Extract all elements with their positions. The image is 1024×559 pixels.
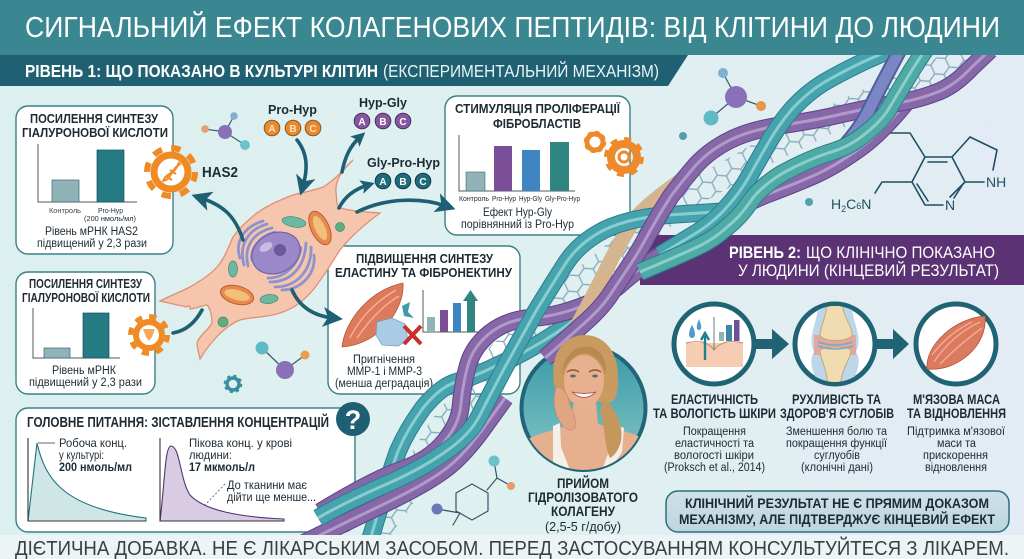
label: HAS2: HAS2	[202, 164, 238, 181]
peptide: Hyp-Gly: Hyp-Gly	[359, 95, 408, 110]
card: fibroblast proliferation: СТИМУЛЯЦІЯ ПРОЛІФЕРАЦІЇ	[455, 101, 620, 116]
chart: culture concentration: Робоча конц.	[59, 436, 127, 450]
icon: molecule upper left	[201, 112, 250, 150]
outcome: muscle: маси та	[937, 438, 977, 450]
label: collagen intake: ГІДРОЛІЗОВАТОГО	[528, 489, 638, 505]
card: elastin and fibronectin: ЕЛАСТИНУ ТА ФІБРОНЕКТИНУ	[335, 265, 513, 280]
outcome: joints: ЗДОРОВ'Я СУГЛОБІВ	[780, 405, 894, 421]
chart: blood concentration: До тканини має	[227, 478, 307, 492]
chart: blood concentration: Пікова конц. у крові	[189, 436, 292, 450]
icon: molecule upper right	[704, 68, 766, 126]
card: hyaluronic acid 1: Рівень мРНК HAS2	[45, 226, 138, 238]
label: collagen intake: (2,5-5 г/добу)	[545, 520, 621, 534]
callout: clinical result	[666, 491, 1009, 532]
chart: blood concentration: людини:	[189, 448, 232, 462]
ponytail	[600, 398, 622, 458]
teal strand two	[640, 50, 925, 272]
arrow: skin to joint	[754, 329, 789, 359]
chemical structure: NH	[986, 174, 1006, 190]
chart: small rising bars	[423, 290, 478, 332]
card: elastin and fibronectin	[328, 246, 520, 394]
peptide: Hyp-Gly: B	[379, 117, 387, 128]
level 2 banner: РІВЕНЬ 2:	[729, 243, 801, 262]
chart: blood concentration: 17 мкмоль/л	[189, 460, 255, 474]
peptide: Pro-Hyp: B	[289, 124, 297, 135]
outcome: joints: покращення функції	[786, 438, 888, 450]
card: hyaluronic acid 2: підвищений у 2,3 рази	[29, 377, 142, 389]
card: fibroblast proliferation: ФІБРОБЛАСТІВ	[493, 116, 581, 131]
chemical structure: C	[846, 196, 856, 212]
title banner	[0, 0, 1024, 55]
callout: clinical result: КЛІНІЧНИЙ РЕЗУЛЬТАТ НЕ Є ПРЯМИМ ДОКАЗОМ	[685, 494, 989, 511]
card: fibroblast proliferation: Gly-Pro-Hyp	[545, 196, 580, 203]
card: elastin and fibronectin: ММР-1 і ММР-3	[347, 366, 422, 378]
card: fibroblast proliferation: Hyp-Gly	[519, 196, 542, 203]
decorative molecule dots	[679, 132, 813, 206]
icon: skin elasticity	[674, 304, 754, 384]
teal strand upper	[660, 50, 890, 255]
level 1 banner: (ЕКСПЕРИМЕНТАЛЬНИЙ МЕХАНІЗМ)	[383, 60, 659, 81]
card: fibroblast proliferation: Ефект Hyp-Gly	[483, 205, 552, 219]
card: hyaluronic acid 1: ПОСИЛЕННЯ СИНТЕЗУ	[30, 111, 159, 126]
outcome: muscle	[907, 391, 1006, 474]
icon: muscle	[916, 304, 996, 384]
chart: culture concentration: 200 нмоль/мл	[59, 460, 132, 474]
outcome: muscle: М'ЯЗОВА МАСА	[913, 391, 1000, 407]
hair fringe	[562, 347, 606, 374]
card: hyaluronic acid 2: ПОСИЛЕННЯ СИНТЕЗУ	[29, 277, 142, 291]
peptide: Gly-Pro-Hyp: Gly-Pro-Hyp	[367, 155, 440, 170]
outcome: skin: ЕЛАСТИЧНІСТЬ	[671, 391, 758, 407]
footer background	[0, 535, 1024, 559]
icon: question mark: ?	[345, 405, 361, 435]
card: hyaluronic acid 2: Рівень мРНК	[52, 365, 116, 377]
shoulders	[529, 402, 638, 470]
outcome: muscle: Підтримка м'язової	[907, 426, 1006, 438]
card: concentration comparison: ГОЛОВНЕ ПИТАННЯ: ЗІСТАВЛЕННЯ КОНЦЕНТРАЦІЙ	[27, 413, 329, 431]
peptide: Pro-Hyp: C	[309, 124, 317, 135]
card: fibroblast proliferation	[445, 96, 630, 235]
DNA helix	[300, 50, 990, 545]
arrow: Pro-Hyp into cell	[297, 140, 306, 186]
arrow: joint to muscle	[875, 329, 909, 359]
teal strand three	[318, 211, 730, 518]
outcome: skin	[653, 391, 776, 474]
purple strand one	[545, 50, 990, 358]
outcome: joints: Зменшення болю та	[786, 426, 888, 438]
icon: muscle with blocked enzyme	[342, 283, 421, 347]
level 1 banner	[0, 55, 688, 86]
hexagon lattice	[375, 55, 975, 535]
outcome: skin: вологості шкіри	[674, 450, 754, 462]
peptide: Gly-Pro-Hyp: C	[419, 177, 427, 188]
woman portrait background	[522, 346, 646, 470]
card: hyaluronic acid 1: ГІАЛУРОНОВОЇ КИСЛОТИ	[22, 125, 168, 140]
icon: second orange gear	[130, 316, 168, 354]
card: hyaluronic acid 1: Pro-Hyp	[98, 206, 123, 215]
purple strand two	[320, 100, 908, 512]
peptide: Pro-Hyp	[264, 102, 321, 136]
chart: blood concentration: дійти ще менше...	[227, 490, 316, 504]
peptide: Pro-Hyp: A	[268, 124, 276, 135]
icon: molecule bottom	[432, 456, 515, 525]
card: hyaluronic acid 2	[16, 272, 155, 394]
card: concentration comparison	[16, 408, 355, 532]
chart: blood concentration	[160, 436, 316, 521]
level 1 banner: РІВЕНЬ 1: ЩО ПОКАЗАНО В КУЛЬТУРІ КЛІТИН	[25, 61, 378, 81]
peptide: Hyp-Gly	[354, 95, 411, 129]
arrow: to fibroblast card	[357, 200, 446, 212]
chart: culture concentration	[28, 436, 146, 521]
card: fibroblast proliferation: Контроль	[459, 196, 489, 203]
outcome: skin: (Proksch et al., 2014)	[664, 462, 765, 474]
chart: culture concentration: у культурі:	[59, 448, 104, 462]
label: collagen intake: ПРИЙОМ	[557, 474, 609, 491]
level 2 banner: ЩО КЛІНІЧНО ПОКАЗАНО	[806, 243, 995, 262]
lavender strand	[845, 50, 900, 145]
outcome: joints: суглуобів	[814, 450, 860, 462]
arrow: from second gear	[173, 310, 202, 333]
outcome: joints	[780, 391, 894, 474]
chemical structure: 2	[841, 204, 846, 214]
facial features	[567, 370, 601, 398]
peptide: Hyp-Gly: A	[358, 117, 366, 128]
card: hyaluronic acid 2: ГІАЛУРОНОВОЇ КИСЛОТИ	[22, 290, 150, 305]
level 2 banner: У ЛЮДИНИ (КІНЦЕВИЙ РЕЗУЛЬТАТ)	[738, 261, 999, 280]
peptide: Gly-Pro-Hyp: B	[399, 177, 407, 188]
woman portrait	[529, 335, 638, 470]
cell	[160, 160, 380, 359]
peptide: Gly-Pro-Hyp	[367, 155, 440, 189]
card: elastin and fibronectin: (менша деградація)	[335, 378, 433, 390]
endoplasmic reticulum	[238, 221, 314, 290]
hand	[554, 387, 575, 430]
chemical structure: N	[945, 197, 955, 213]
nucleus	[245, 224, 307, 282]
icon: HAS2 gear	[147, 148, 195, 196]
outcome: skin: Покращення	[683, 426, 746, 438]
card: elastin and fibronectin: ПІДВИЩЕННЯ СИНТЕЗУ	[356, 251, 494, 266]
outcome: joints: (клонічні дані)	[801, 462, 873, 474]
label: collagen intake	[528, 474, 638, 534]
mitochondria	[218, 208, 336, 308]
outcome: skin: ТА ВОЛОГІСТЬ ШКІРИ	[653, 405, 776, 421]
peptide: Pro-Hyp: Pro-Hyp	[268, 102, 317, 117]
green organelles	[218, 215, 344, 327]
level 2 banner	[640, 235, 1024, 285]
card: fibroblast proliferation: порівнянний із Pro-Hyp	[461, 217, 574, 231]
outcome: muscle: прискорення	[923, 450, 988, 462]
chemical structure	[831, 133, 1006, 214]
purple strand lower	[300, 398, 505, 545]
label: collagen intake: КОЛАГЕНУ	[551, 503, 615, 519]
card: elastin and fibronectin: Пригнічення	[353, 354, 415, 366]
outcome: skin: еластичності та	[675, 438, 755, 450]
card: fibroblast proliferation: Pro-Hyp	[492, 196, 516, 203]
card: hyaluronic acid 1: Контроль	[49, 206, 81, 215]
icon: question mark	[336, 402, 370, 436]
tank top	[553, 423, 624, 470]
face	[564, 355, 604, 407]
beige strand	[575, 181, 680, 330]
icon: knee joint	[795, 300, 875, 392]
icon: small teal gear	[225, 376, 241, 392]
icon: orange gears	[586, 132, 641, 174]
peptide: Hyp-Gly: C	[399, 117, 407, 128]
chemical structure: H	[831, 196, 841, 212]
hair	[553, 335, 618, 403]
card: hyaluronic acid 1: (200 нмоль/мл)	[84, 214, 136, 223]
outcome: muscle: відновлення	[925, 462, 987, 474]
card: hyaluronic acid 1	[16, 106, 173, 254]
peptide: Gly-Pro-Hyp: A	[379, 177, 387, 188]
arrow: to HAS2	[201, 198, 243, 240]
teal strand lower	[370, 255, 660, 540]
icon: molecule lower centre	[256, 342, 310, 379]
card: hyaluronic acid 1: підвищений у 2,3 рази	[37, 238, 147, 250]
callout: clinical result: МЕХАНІЗМУ, АЛЕ ПІДТВЕРДЖУЄ КІНЦЕВИЙ ЕФЕКТ	[679, 510, 995, 527]
arrow: to Hyp-Gly	[342, 137, 360, 172]
chemical structure: 6N	[856, 196, 871, 212]
arrow: to Gly-Pro-Hyp	[339, 185, 368, 208]
arrow: to elastin card	[292, 290, 333, 318]
outcome: joints: РУХЛИВІСТЬ ТА	[792, 391, 881, 407]
